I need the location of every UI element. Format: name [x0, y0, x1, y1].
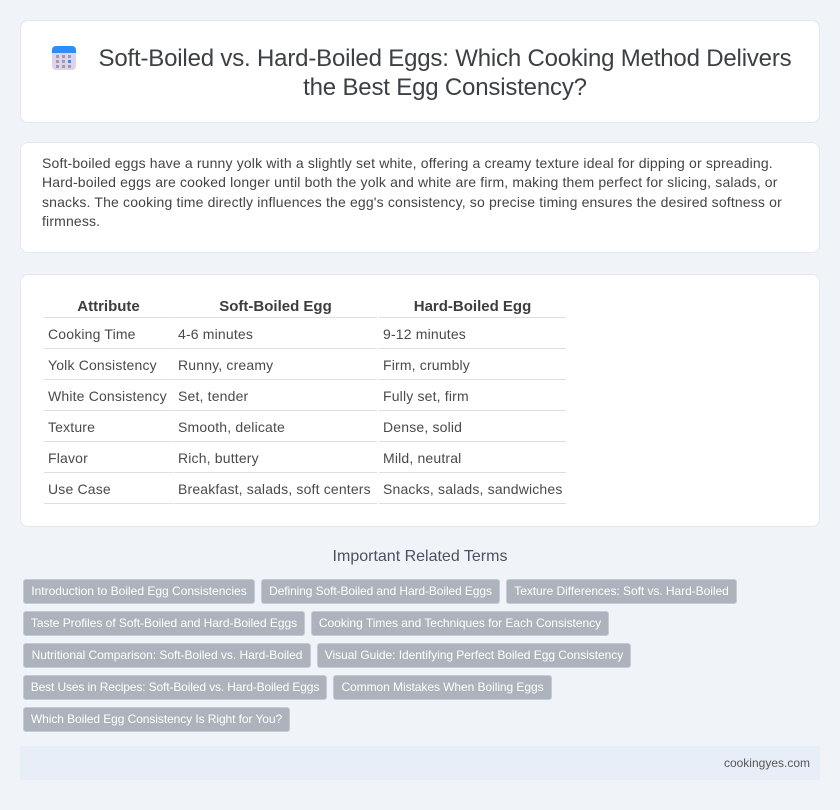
tag — [311, 611, 609, 636]
row: texture: Smooth, delicate — [178, 419, 285, 435]
row: white consistency — [48, 388, 469, 404]
row: yolk consistency: Firm, crumbly — [383, 357, 470, 373]
tag — [317, 643, 631, 668]
intro text — [42, 155, 782, 229]
row: white consistency: White Consistency — [48, 388, 167, 404]
tag: Introduction to Boiled Egg Consistencies — [31, 584, 247, 598]
intro panel — [20, 142, 820, 253]
tag — [333, 675, 552, 700]
intro text: snacks. The cooking time directly influences the egg's consistency, so precise timing ensures the desired softness or — [42, 194, 782, 210]
header panel — [20, 20, 820, 123]
footer bar — [20, 746, 820, 780]
row: use case: Breakfast, salads, soft centers — [178, 481, 371, 497]
row: flavor: Flavor — [48, 450, 88, 466]
icon: calendar — [52, 46, 76, 70]
tag: Texture Differences: Soft vs. Hard-Boiled — [514, 584, 729, 598]
intro text: Soft-boiled eggs have a runny yolk with a slightly set white, offering a creamy texture ideal for dipping or spreading. — [42, 155, 773, 171]
tag: Best Uses in Recipes: Soft-Boiled vs. Hard-Boiled Eggs — [31, 680, 319, 694]
row: yolk consistency — [48, 357, 470, 373]
tag — [261, 579, 500, 604]
header row: Soft-Boiled Egg — [219, 298, 332, 315]
row: use case — [48, 481, 563, 497]
related terms tags — [23, 579, 737, 732]
tag — [23, 675, 327, 700]
title: the Best Egg Consistency? — [303, 74, 587, 101]
row: flavor — [48, 450, 461, 466]
title: Soft-Boiled vs. Hard-Boiled Eggs: Which Cooking Method Delivers — [98, 45, 791, 72]
footer source: cookingyes.com — [724, 756, 810, 770]
tag: Cooking Times and Techniques for Each Consistency — [319, 616, 601, 630]
row: texture: Dense, solid — [383, 419, 462, 435]
row: flavor: Rich, buttery — [178, 450, 259, 466]
tag — [23, 611, 305, 636]
related terms heading: Important Related Terms — [333, 548, 507, 565]
header row: Attribute — [77, 298, 140, 315]
row: use case: Use Case — [48, 481, 111, 497]
row: white consistency: Set, tender — [178, 388, 248, 404]
row: cooking time: 9-12 minutes — [383, 326, 466, 342]
tag: Taste Profiles of Soft-Boiled and Hard-Boiled Eggs — [31, 616, 297, 630]
row: cooking time — [48, 326, 466, 342]
tag — [506, 579, 737, 604]
tag — [23, 643, 311, 668]
row: white consistency: Fully set, firm — [383, 388, 469, 404]
row: use case: Snacks, salads, sandwiches — [383, 481, 563, 497]
row: flavor: Mild, neutral — [383, 450, 461, 466]
tag: Defining Soft-Boiled and Hard-Boiled Eggs — [269, 584, 492, 598]
comparison table panel — [20, 274, 820, 527]
intro text: firmness. — [42, 213, 100, 229]
header row — [77, 298, 531, 315]
row: yolk consistency: Yolk Consistency — [48, 357, 157, 373]
tag: Which Boiled Egg Consistency Is Right for You? — [31, 712, 282, 726]
header row: Hard-Boiled Egg — [414, 298, 531, 315]
tag: Nutritional Comparison: Soft-Boiled vs. Hard-Boiled — [32, 648, 302, 662]
tag — [23, 707, 290, 732]
row: texture — [48, 419, 462, 435]
tag: Visual Guide: Identifying Perfect Boiled Egg Consistency — [325, 648, 623, 662]
row: cooking time: 4-6 minutes — [178, 326, 253, 342]
intro text: Hard-boiled eggs are cooked longer until both the yolk and white are firm, making them perfect for slicing, salads, or — [42, 174, 778, 190]
tag: Common Mistakes When Boiling Eggs — [341, 680, 544, 694]
row: texture: Texture — [48, 419, 95, 435]
row: yolk consistency: Runny, creamy — [178, 357, 273, 373]
row: cooking time: Cooking Time — [48, 326, 136, 342]
title — [98, 45, 791, 101]
tag — [23, 579, 255, 604]
